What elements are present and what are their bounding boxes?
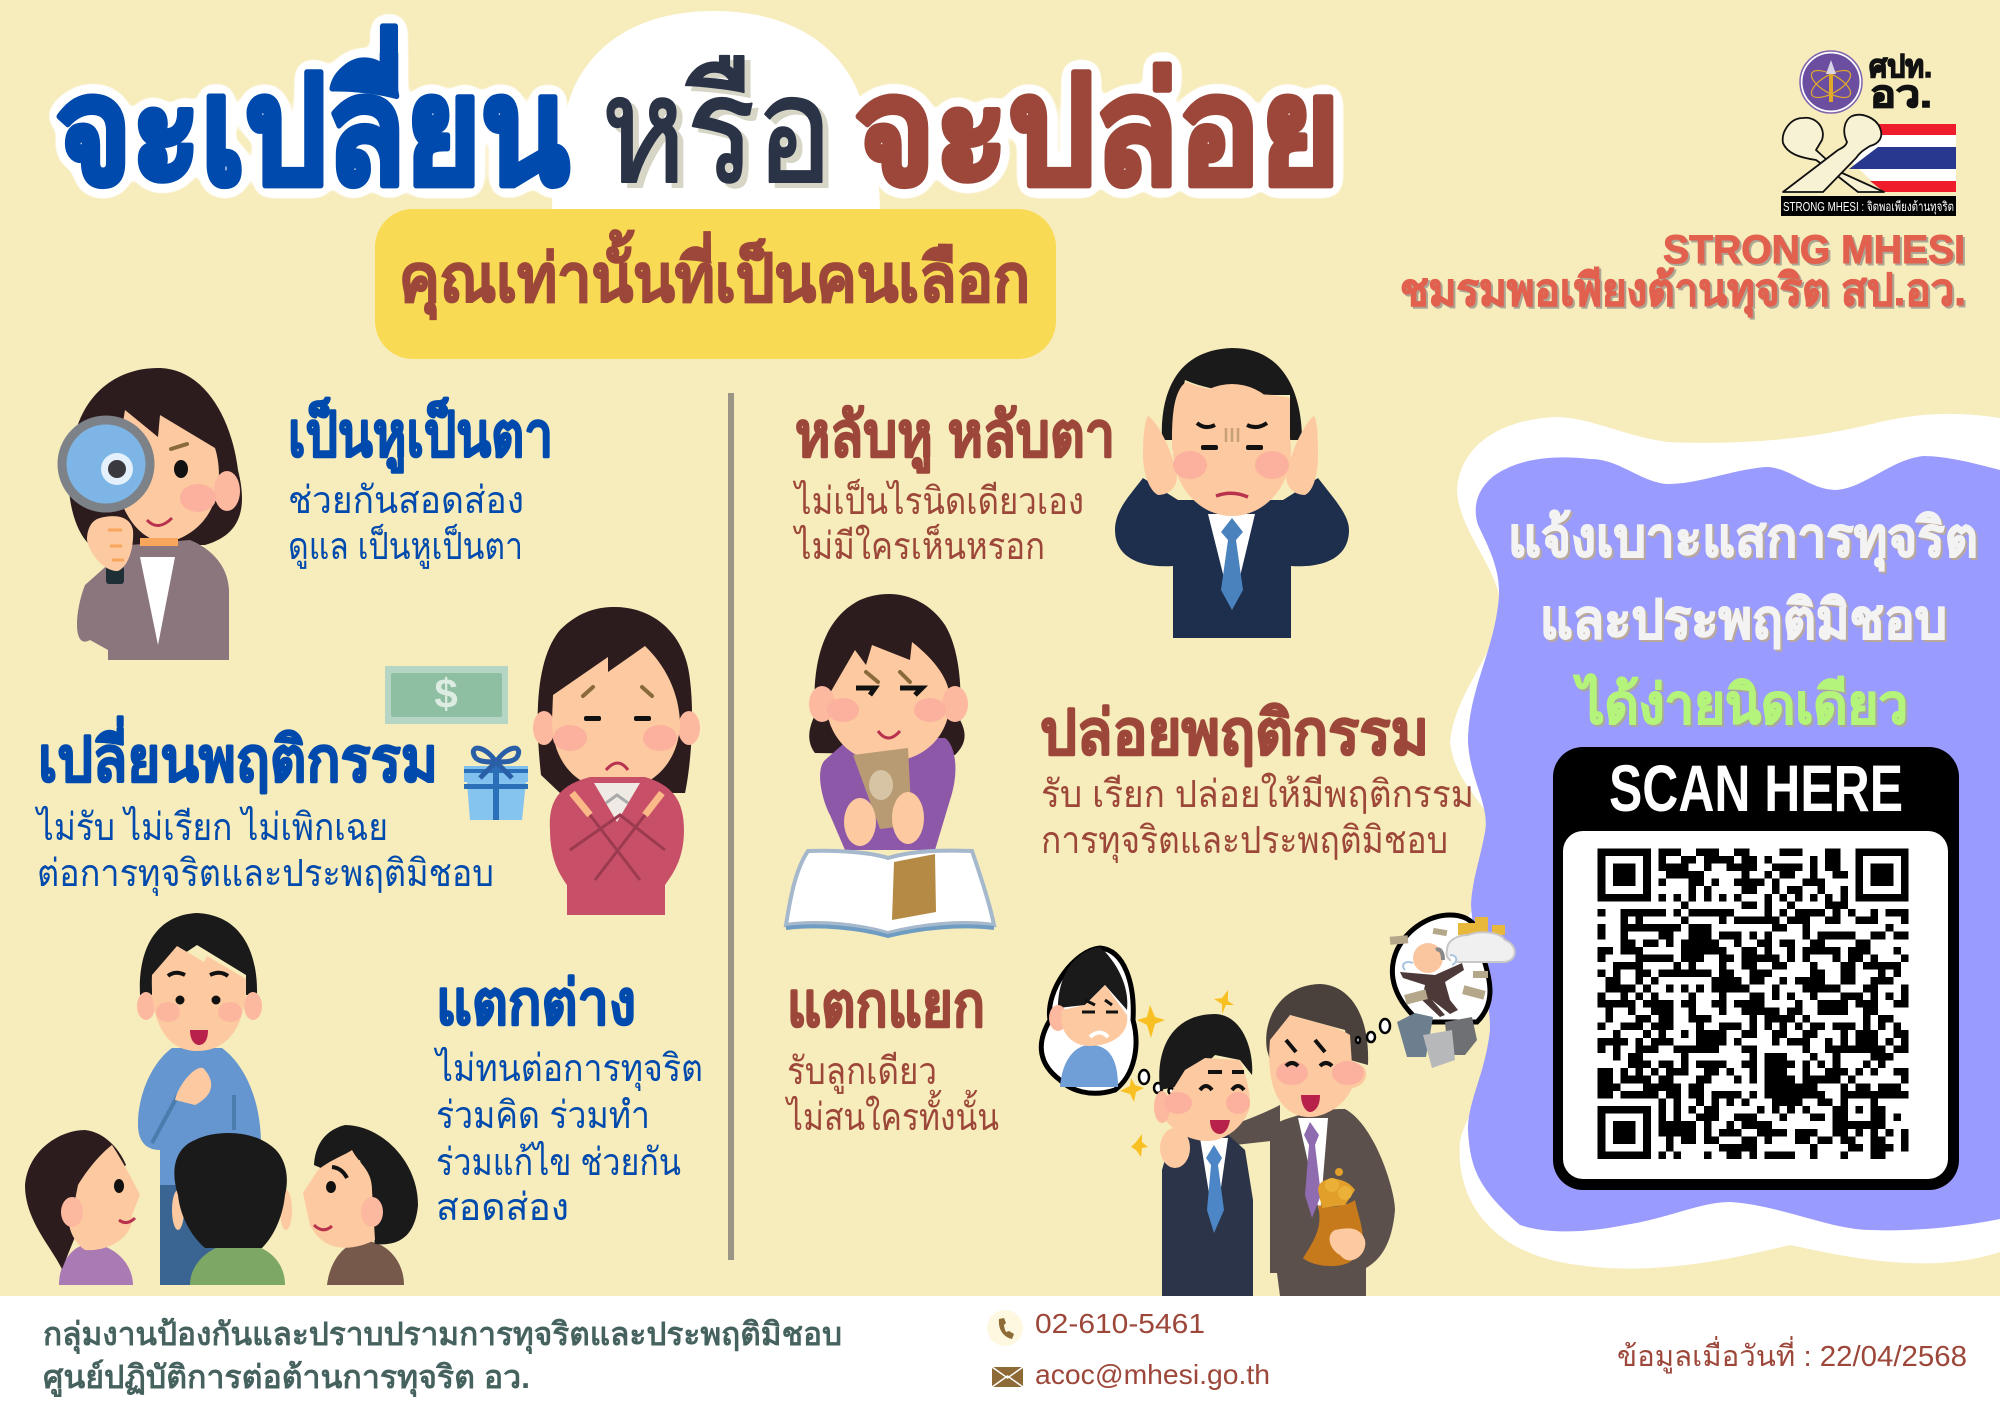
icon: money bag <box>1303 1168 1365 1266</box>
club name english: STRONG MHESI <box>1663 228 1965 272</box>
illustration: woman with magnifier <box>62 368 242 660</box>
divider <box>728 393 734 1260</box>
title <box>56 26 1340 215</box>
heading: แตกแยก <box>787 971 985 1040</box>
man left <box>1154 1014 1253 1296</box>
blob: white outer <box>1450 414 2000 1269</box>
heading: ปล่อยพฤติกรรม <box>1040 699 1429 768</box>
heading: เปลี่ยนพฤติกรรม <box>38 716 438 795</box>
body line 1: ไม่รับ ไม่เรียก ไม่เพิกเฉย <box>34 806 388 849</box>
title word: let go: จะปล่อย <box>855 47 1340 215</box>
icon: banknote: $ <box>434 670 458 717</box>
arm hand <box>1160 1128 1190 1168</box>
body line 2: ไม่สนใครทั้งนั้น <box>784 1089 999 1139</box>
banknotes <box>1390 928 1488 1005</box>
buildings <box>1397 1013 1477 1068</box>
sparkle stars <box>1120 990 1234 1157</box>
body line 1: ไม่ทนต่อการทุจริต <box>433 1047 703 1091</box>
logo block <box>1781 49 1956 216</box>
body line 3: ร่วมแก้ไข ช่วยกัน <box>436 1141 681 1184</box>
data date: ข้อมูลเมื่อวันที่ : 22/04/2568 <box>1617 1336 1967 1374</box>
body line 1: รับลูกเดียว <box>787 1051 937 1094</box>
title word: or: หรือ <box>601 46 833 214</box>
thought dots <box>1139 1070 1174 1094</box>
illustration: two men shaking shoulders <box>1120 984 1395 1296</box>
illustration: woman crossing arms <box>533 607 700 915</box>
section: let it go <box>1040 699 1474 863</box>
body line 2: การทุจริตและประพฤติมิชอบ <box>1041 820 1448 863</box>
logo text second line: อว. <box>1870 74 1932 116</box>
section: make a difference <box>433 969 703 1229</box>
thai flag <box>1849 124 1956 192</box>
club name thai: ชมรมพอเพียงต้านทุจริต สป.อว. <box>1400 266 1966 318</box>
logo text: ศปท. <box>1869 49 1932 84</box>
man right <box>1182 984 1395 1296</box>
body line 2: ไม่มีใครเห็นหรอก <box>792 523 1045 568</box>
organisation line 1: กลุ่มงานป้องกันและปราบปรามการทุจริตและประพฤติมิชอบ <box>43 1316 842 1355</box>
qr code <box>1598 848 1908 1159</box>
body line 1: ช่วยกันสอดส่อง <box>288 480 524 522</box>
title word: change: จะเปลี่ยน <box>56 26 569 215</box>
icon: gold coins <box>1458 917 1505 935</box>
organisation line 2: ศูนย์ปฏิบัติการต่อต้านการทุจริต อว. <box>43 1359 530 1398</box>
phone number: 02-610-5461 <box>1035 1308 1205 1339</box>
body line 4: สอดส่อง <box>436 1187 569 1229</box>
section: divided <box>784 971 999 1139</box>
heading: เป็นหูเป็นตา <box>288 397 553 473</box>
subtitle pill <box>375 209 1056 359</box>
section: be eyes and ears <box>288 397 553 569</box>
scan here label: SCAN HERE <box>1609 751 1903 825</box>
icon: envelope <box>992 1367 1023 1387</box>
icon: crossed arms <box>1783 115 1884 192</box>
icon: phone <box>987 1310 1023 1346</box>
footer band <box>0 1296 2000 1414</box>
illustration: group of people <box>25 913 418 1285</box>
body line 1: ไม่เป็นไรนิดเดียวเอง <box>792 478 1084 523</box>
club name <box>1400 228 1966 318</box>
illustration: man covering ears <box>1115 348 1349 638</box>
person: man right <box>303 1125 418 1285</box>
old man flying <box>1400 943 1464 1017</box>
body line 2: ดูแล เป็นหูเป็นตา <box>288 523 523 569</box>
person: woman left <box>25 1130 140 1285</box>
section: change behaviour <box>34 716 494 896</box>
blob heading <box>1508 508 1978 735</box>
section: close ears and eyes <box>792 401 1115 568</box>
icon: cloud <box>1447 932 1515 962</box>
white arch behind title <box>552 11 880 215</box>
thought dots right <box>1356 1019 1390 1043</box>
heading: แตกต่าง <box>436 969 636 1038</box>
body line 2: ร่วมคิด ร่วมทำ <box>436 1095 650 1137</box>
body line 2: ต่อการทุจริตและประพฤติมิชอบ <box>37 853 494 896</box>
footer contacts <box>987 1308 1967 1390</box>
blob: purple inner <box>1468 456 2000 1231</box>
illustration: thought bubble right <box>1356 915 1515 1068</box>
blob heading line 1: แจ้งเบาะแสการทุจริต <box>1508 508 1978 572</box>
heading: หลับหู หลับตา <box>795 401 1115 473</box>
qr card <box>1553 747 1959 1190</box>
illustration: thought bubble left <box>1041 947 1174 1094</box>
email: acoc@mhesi.go.th <box>1035 1359 1270 1390</box>
blob heading line 2: และประพฤติมิชอบ <box>1540 590 1947 650</box>
strong mhesi band <box>1781 196 1956 216</box>
icon: ministry seal <box>1800 51 1862 113</box>
person: back of head <box>172 1133 292 1285</box>
subtitle text: คุณเท่านั้นที่เป็นคนเลือก <box>399 229 1030 320</box>
illustration: woman with money and book <box>786 594 994 936</box>
icon: gift <box>464 748 528 820</box>
icon: banknote <box>385 666 508 724</box>
body line 1: รับ เรียก ปล่อยให้มีพฤติกรรม <box>1041 773 1474 816</box>
blob heading line 3: ได้ง่ายนิดเดียว <box>1573 673 1908 735</box>
footer organisation text <box>43 1316 842 1398</box>
